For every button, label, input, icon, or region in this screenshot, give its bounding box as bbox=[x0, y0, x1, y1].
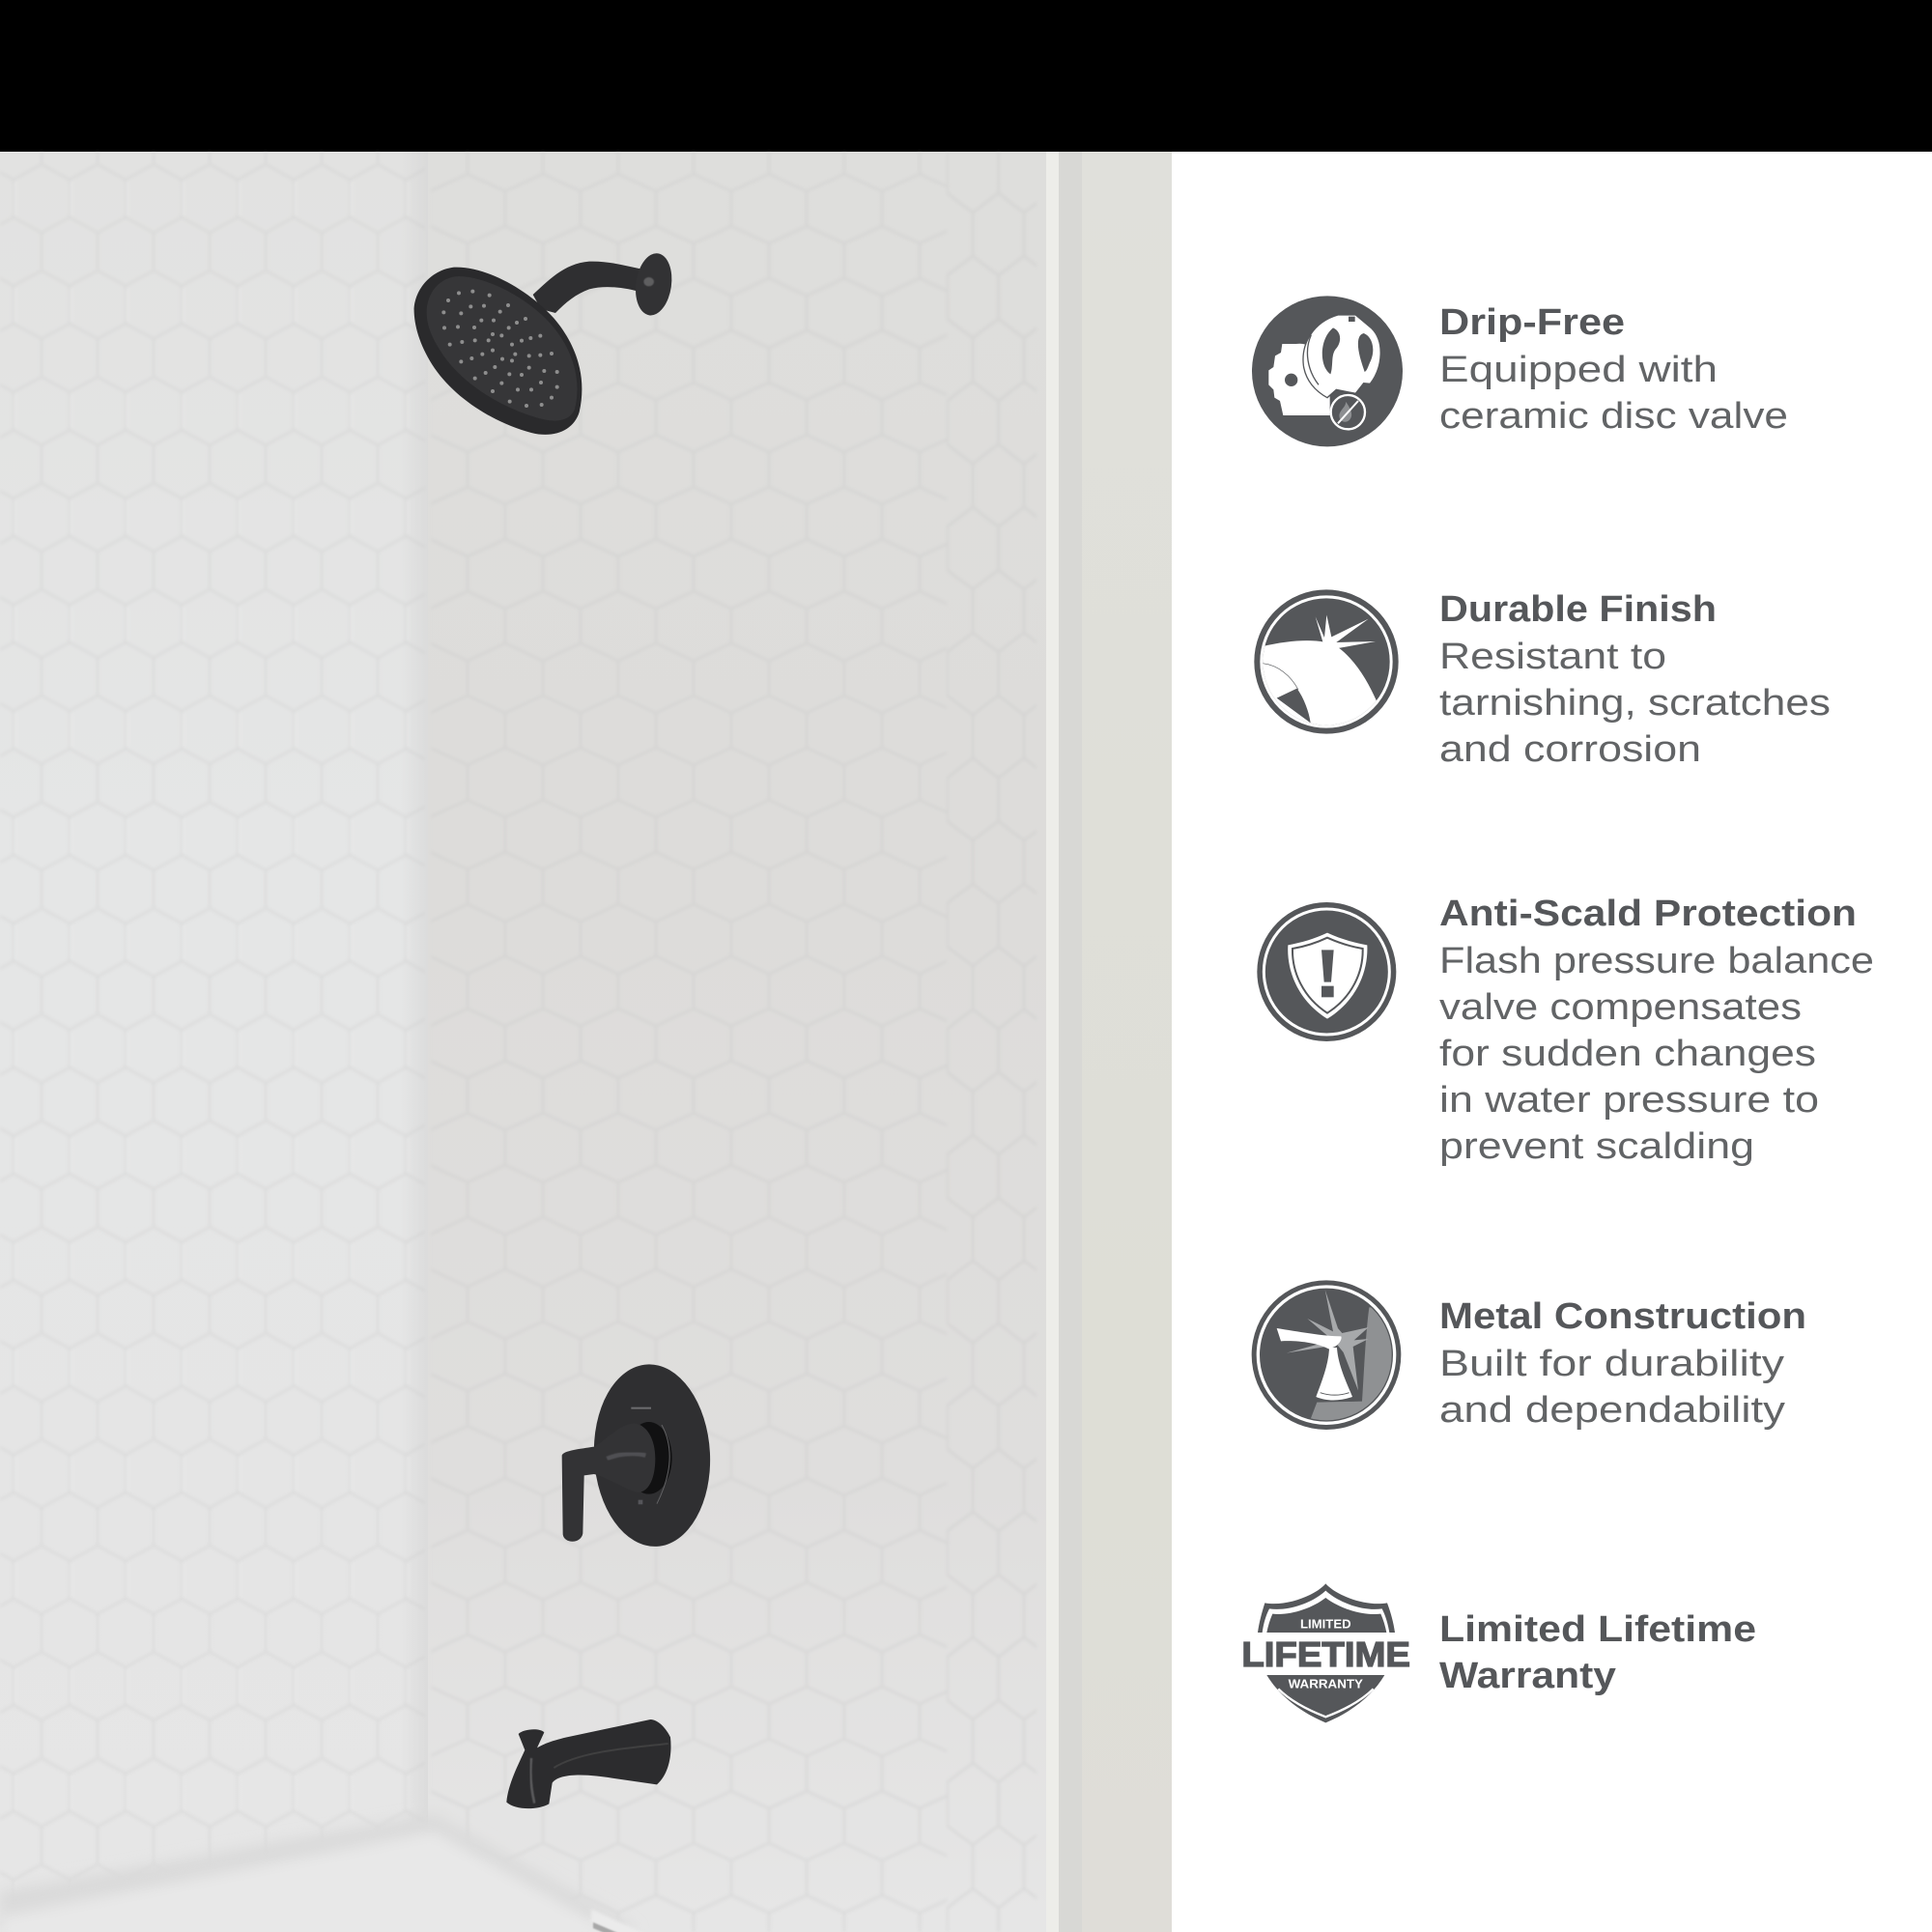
text: Metal Construction: Metal Construction bbox=[1439, 1296, 1806, 1337]
text: Metal Construction: Built for durability bbox=[1439, 1344, 1784, 1384]
shower head bbox=[414, 251, 675, 435]
photo: tiled shower wall bbox=[0, 152, 1172, 1932]
text: Anti-Scald Protection: prevent scalding bbox=[1439, 1126, 1754, 1167]
black top band bbox=[0, 0, 1932, 152]
tub spout bbox=[506, 1719, 671, 1808]
text: Durable Finish bbox=[1439, 589, 1831, 770]
text: Drip-Free: ceramic disc valve bbox=[1439, 396, 1788, 437]
panel: white features column bbox=[1172, 152, 1932, 1932]
icon: durable finish bbox=[1257, 592, 1407, 737]
photo: bathtub rim bbox=[0, 1814, 651, 1932]
valve handle and trim plate bbox=[562, 1361, 715, 1549]
icon: anti-scald shield bbox=[1257, 902, 1396, 1041]
text: Drip-Free: Drip-Free bbox=[1439, 302, 1625, 343]
text: Drip-Free: Equipped with bbox=[1439, 350, 1718, 390]
text: Anti-Scald Protection: Anti-Scald Protection bbox=[1439, 894, 1857, 934]
text: Limited Lifetime Warranty bbox=[1439, 1609, 1756, 1696]
text: Anti-Scald Protection bbox=[1439, 894, 1874, 1167]
icon: limited lifetime warranty badge: LIMITED bbox=[1300, 1618, 1351, 1632]
text: Durable Finish: Durable Finish bbox=[1439, 589, 1717, 630]
icon: limited lifetime warranty badge bbox=[1241, 1583, 1410, 1722]
icon: limited lifetime warranty badge: WARRANTY bbox=[1289, 1677, 1364, 1690]
text: Durable Finish: tarnishing, scratches bbox=[1439, 683, 1831, 724]
text: Limited Lifetime Warranty: Limited Lifetime bbox=[1439, 1609, 1756, 1650]
text: Anti-Scald Protection: in water pressure to bbox=[1439, 1080, 1819, 1121]
text: Limited Lifetime Warranty: Warranty bbox=[1439, 1656, 1616, 1696]
icon: ceramic disc valve bbox=[1252, 296, 1403, 446]
text: Durable Finish: and corrosion bbox=[1439, 729, 1701, 770]
text: Anti-Scald Protection: Flash pressure balance bbox=[1439, 941, 1874, 981]
text: Metal Construction: and dependability bbox=[1439, 1390, 1785, 1431]
icon: limited lifetime warranty badge: LIFETIME bbox=[1241, 1634, 1410, 1674]
icon: metal construction bbox=[1252, 1280, 1401, 1430]
text: Anti-Scald Protection: valve compensates bbox=[1439, 987, 1802, 1028]
text: Metal Construction bbox=[1439, 1296, 1806, 1431]
text: Durable Finish: Resistant to bbox=[1439, 637, 1666, 677]
text: Drip-Free bbox=[1439, 302, 1788, 437]
text: Anti-Scald Protection: for sudden changes bbox=[1439, 1034, 1816, 1074]
